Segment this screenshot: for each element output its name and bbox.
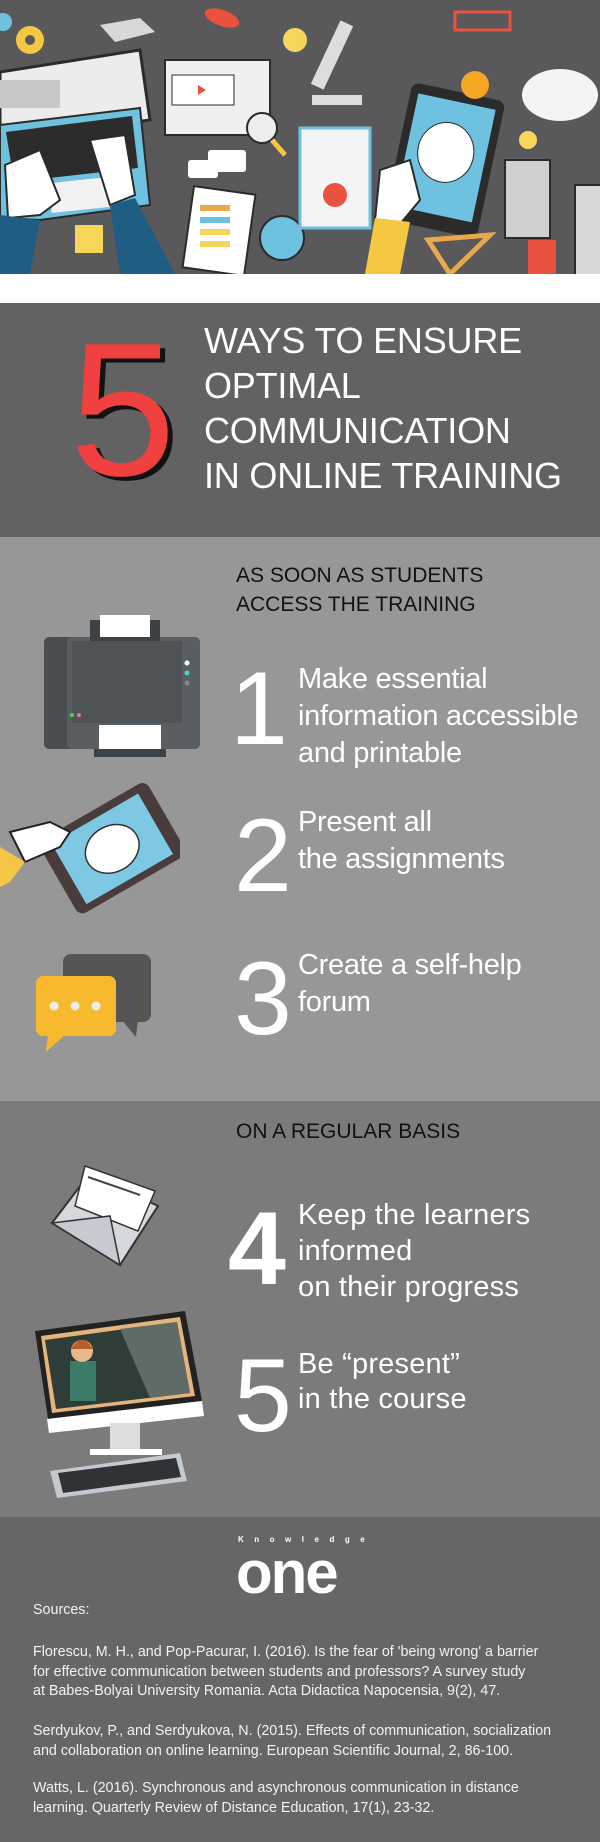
title text: OPTIMAL [204, 365, 361, 406]
title text [204, 320, 562, 496]
text 2: Present all [298, 806, 432, 838]
text 4 [298, 1199, 530, 1303]
sources text: Serdyukov, P., and Serdyukova, N. (2015). Effects of communication, socialization [33, 1723, 551, 1739]
text 3 [298, 949, 522, 1018]
panel: on a regular basis [0, 1100, 600, 1517]
icon: computer with teacher [35, 1311, 204, 1498]
text 4: on their progress [298, 1271, 519, 1303]
heading: as soon as students: AS SOON AS STUDENTS [236, 564, 483, 587]
panel: as soon as students access [0, 537, 600, 1100]
logo: knowledge one [236, 1535, 375, 1606]
text 4: Keep the learners [298, 1199, 530, 1231]
sources text: Sources: [33, 1602, 89, 1618]
text 1 [298, 663, 578, 769]
sources text: learning. Quarterly Review of Distance Education, 17(1), 23-32. [33, 1800, 434, 1816]
sources text: Watts, L. (2016). Synchronous and asynchronous communication in distance [33, 1780, 519, 1796]
text 3: forum [298, 986, 371, 1018]
hero illustration [0, 0, 600, 274]
text 5 [298, 1348, 467, 1415]
text 5: Be “present” [298, 1348, 460, 1380]
title panel [0, 303, 600, 537]
text 2 [298, 806, 505, 875]
icon: envelope [50, 1165, 160, 1266]
sources text [33, 1602, 551, 1816]
heading: on a regular basis: ON A REGULAR BASIS [236, 1120, 460, 1143]
sources text: for effective communication between students and professors? A survey study [33, 1664, 525, 1680]
title text: WAYS TO ENSURE [204, 320, 522, 361]
title text: IN ONLINE TRAINING [204, 455, 562, 496]
text 5: in the course [298, 1383, 467, 1415]
icon: printer [44, 615, 200, 757]
heading: as soon as students [236, 564, 483, 616]
text 1: and printable [298, 737, 462, 769]
logo: knowledge one: Knowledge [238, 1535, 375, 1544]
sources text: Florescu, M. H., and Pop-Pacurar, I. (2016). Is the fear of 'being wrong' a barrier [33, 1644, 538, 1660]
sources text: and collaboration on online learning. European Scientific Journal, 2, 86-100. [33, 1742, 513, 1758]
big red number 5: 5 [70, 304, 176, 516]
number 4: 4 [228, 1191, 286, 1307]
item 1 [230, 651, 578, 769]
text 1: Make essential [298, 663, 487, 695]
heading: as soon as students: ACCESS THE TRAINING [236, 593, 476, 616]
item 2 [234, 798, 505, 914]
icon: chat bubbles [36, 954, 151, 1052]
item 3 [234, 941, 522, 1057]
item 4 [228, 1191, 530, 1307]
footer: logo and sources [0, 1517, 600, 1842]
item 5 [234, 1338, 467, 1454]
text 2: the assignments [298, 843, 505, 875]
laptop [0, 50, 175, 274]
text 3: Create a self-help [298, 949, 522, 981]
number 2: 2 [234, 798, 292, 914]
text 1: information accessible [298, 700, 578, 732]
title text: COMMUNICATION [204, 410, 511, 451]
sources text: at Babes-Bolyai University Romania. Acta Didactica Napocensia, 9(2), 47. [33, 1683, 500, 1699]
icon: hand with tablet [0, 783, 180, 914]
text 4: informed [298, 1235, 412, 1267]
number 1: 1 [230, 651, 288, 767]
logo: knowledge one: one [236, 1539, 337, 1606]
number 3: 3 [234, 941, 292, 1057]
number 5: 5 [234, 1338, 292, 1454]
